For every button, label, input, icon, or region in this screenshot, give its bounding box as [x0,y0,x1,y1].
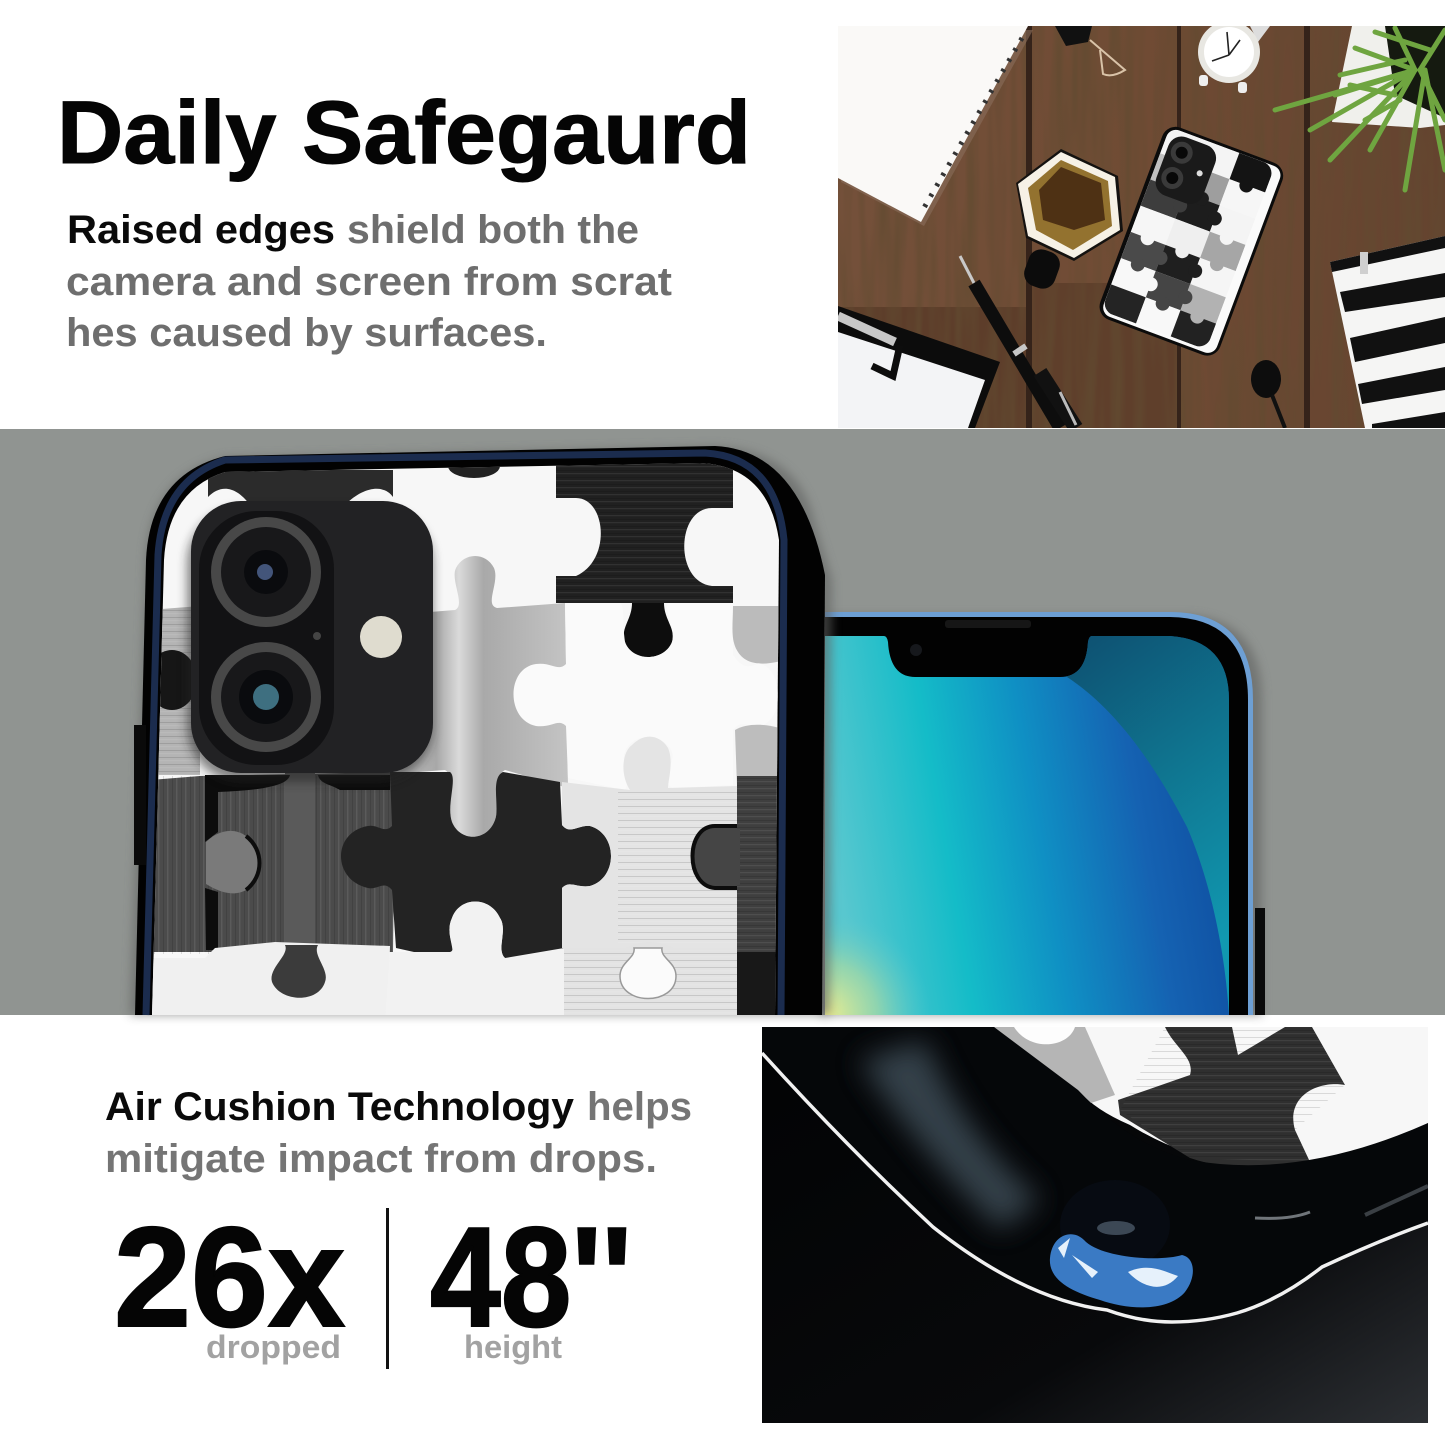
text: raised edges line 2: camera and screen from scrat [66,260,672,304]
heading: Daily Safegaurd: Daily Safegaurd [57,82,751,182]
right grey piece [732,606,778,664]
label dropped: dropped [206,1329,341,1365]
phone shadow [820,616,1262,1015]
wallpaper gradient [825,635,1230,1015]
grey knob in dark piece [206,831,260,893]
dark knob join [716,829,740,885]
dark strip right [737,776,785,952]
wallpaper dark arc [1067,635,1229,1015]
text block: raised edges [66,208,672,355]
light piece brushing [618,790,737,945]
number 26x: 26x [114,1198,345,1357]
earphone [1251,360,1285,428]
striped notebook [1330,236,1445,428]
left grey piece [158,606,200,775]
photo: water drop on case edge [762,1027,1428,1423]
screen [825,635,1230,1015]
white base [150,460,785,1020]
phone black bezel [825,617,1248,1015]
wallpaper yellow glow [825,931,919,1015]
lens island [199,511,334,765]
puzzle corner [994,1027,1428,1170]
drop blue pool [1050,1234,1193,1307]
case outer body [135,446,825,1015]
phone frame [825,612,1253,1015]
phone case on desk [1096,123,1287,360]
text: raised edges line 1 bold: Raised edges [67,208,335,252]
white knob on grey [1014,1027,1075,1044]
text: raised edges line 3: hes caused by surfaces. [66,311,547,355]
phone case back with puzzle [130,446,832,1020]
bottom right tab [620,948,676,998]
black center piece [341,772,611,960]
puzzle artwork [147,454,785,1020]
notch at top edge [448,466,500,478]
microphone [313,632,321,640]
stat: 48 inch height [430,1198,632,1365]
pen [960,256,1076,428]
white center piece [514,608,778,774]
dark puzzle piece [1118,1027,1345,1168]
camera shadow [187,508,433,782]
binder clip [1055,26,1125,75]
case frame band [762,1027,1428,1322]
mini camera [1156,136,1216,204]
speaker grille [945,620,1031,628]
selfie camera [910,644,922,656]
dark knob right inner [692,826,740,888]
text: raised edges line 1 grey: shield both the [347,208,639,252]
dark background [762,1027,1428,1423]
text: air cushion line 2: mitigate impact from drops. [105,1137,657,1181]
text block: air cushion [105,1085,692,1181]
stat divider [386,1208,389,1369]
top left dark piece [208,470,393,501]
light piece right [562,737,737,948]
black tab under top right piece [624,603,673,657]
spiral notebook [838,26,1033,226]
grey middle piece [380,556,568,837]
black top right piece [556,460,733,603]
water drop [1050,1180,1193,1307]
clipboard [838,306,1000,428]
wood plank shade [1032,283,1177,428]
camera body [191,501,433,773]
black groove lower [205,888,218,950]
stat: 26x dropped [114,1198,345,1365]
frame glint [1255,1212,1310,1218]
camera module [187,501,433,782]
bottom lens [211,642,321,752]
dark grey left piece [150,772,395,952]
white knob right in black piece [684,508,735,586]
black dot behind camera [160,650,191,710]
case white rim line [762,1053,1428,1322]
black groove under camera [205,775,390,842]
number 48 inch: 48'' [430,1198,632,1357]
drop dark dome [1060,1180,1170,1270]
dark vertical band [285,772,315,957]
drop glint [1097,1221,1135,1235]
side button [1255,908,1265,1015]
mini puzzle grid [1101,127,1275,350]
wood grain [843,26,1185,428]
side button left [134,725,146,865]
flash [360,616,402,658]
right grey piece lower [735,725,785,786]
coffee mug [1016,149,1123,292]
navy bezel [146,453,784,1015]
wood plank shade lower left [838,307,1026,428]
label height: height [464,1329,562,1365]
mini case body [1096,123,1287,360]
wood plank seams [1026,26,1310,428]
grey middle band [0,429,1445,1015]
sheen highlight [860,1040,1040,1230]
plant [1275,26,1445,190]
mini case white strip [1100,127,1283,356]
text: air cushion line 1 grey: helps [587,1085,692,1129]
text: air cushion line 1 bold: Air Cushion Technology [105,1085,575,1129]
bottom row center [385,902,568,1020]
photo: desk flat lay with phone case [838,21,1445,428]
white knob left in black piece [552,498,601,576]
iPhone front with screen [820,612,1265,1015]
dark stem knob bottom [272,945,326,998]
top lens [211,517,321,627]
bottom row white pieces [150,942,390,1020]
bottom right dark corner [737,952,785,1020]
wood desk [838,26,1445,428]
lower frame highlight [1365,1186,1428,1215]
bottom row right [564,942,737,1020]
case shadow [130,447,832,1015]
drop highlights [1058,1238,1178,1287]
grey puzzle piece [994,1027,1115,1105]
alarm clock [1198,21,1270,93]
